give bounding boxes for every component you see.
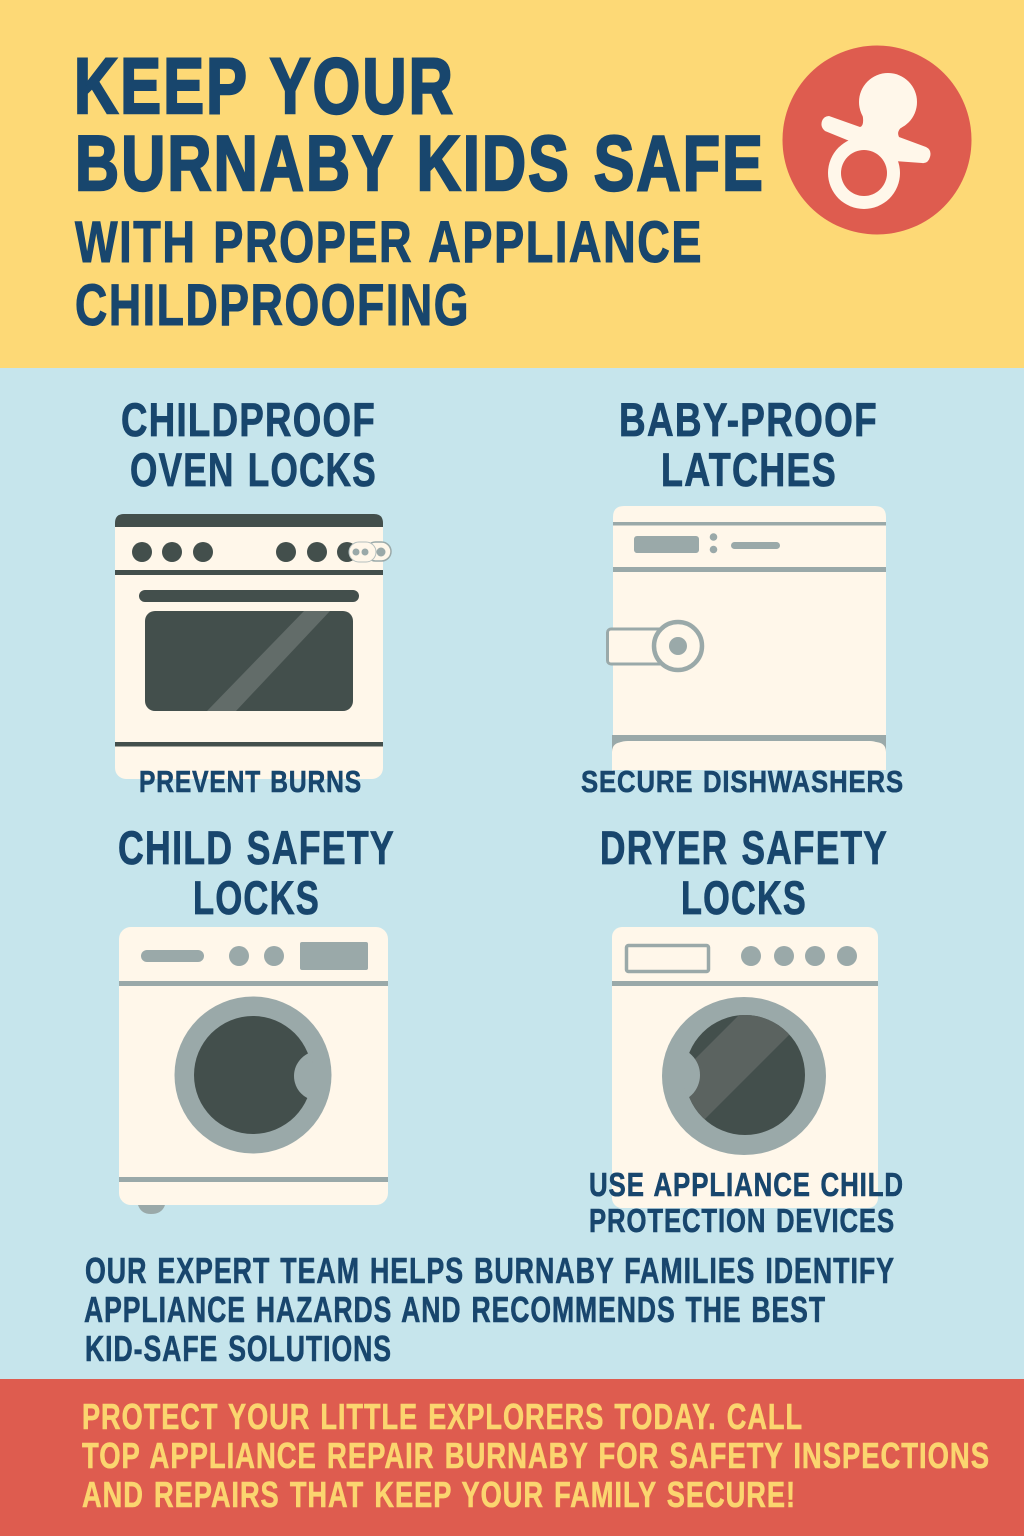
title (74, 41, 765, 207)
heading: dryer safety locks: LOCKS (681, 871, 807, 924)
call to action: PROTECT YOUR LITTLE EXPLORERS TODAY. CALL (82, 1396, 803, 1437)
call to action: AND REPAIRS THAT KEEP YOUR FAMILY SECURE! (82, 1474, 796, 1515)
subtitle: CHILDPROOFING (75, 273, 470, 338)
icon: pacifier badge (782, 46, 972, 234)
heading: childproof oven locks (121, 393, 377, 496)
text block: expert team (84, 1250, 895, 1369)
icon: dishwasher latch (608, 622, 702, 670)
title: KEEP YOUR (74, 41, 455, 130)
call to action (82, 1396, 990, 1515)
caption: secure dishwashers: SECURE DISHWASHERS (581, 764, 904, 799)
heading: childproof oven locks: OVEN LOCKS (130, 443, 377, 496)
panel: child safety locks (118, 821, 395, 1214)
caption: use appliance child protection devices (589, 1166, 904, 1239)
caption: use appliance child protection devices: USE APPLIANCE CHILD (589, 1166, 904, 1203)
caption: prevent burns: PREVENT BURNS (139, 764, 362, 799)
heading: dryer safety locks: DRYER SAFETY (600, 821, 888, 874)
subtitle: WITH PROPER APPLIANCE (75, 210, 703, 275)
icon: dishwasher (608, 506, 886, 778)
heading: childproof oven locks: CHILDPROOF (121, 393, 376, 446)
icon: oven knob lock (349, 542, 391, 562)
heading: dryer safety locks (600, 821, 888, 924)
heading: baby-proof latches (619, 393, 878, 496)
heading: baby-proof latches: BABY-PROOF (619, 393, 878, 446)
title: BURNABY KIDS SAFE (75, 119, 765, 207)
footer band (0, 1379, 1024, 1536)
panel: oven locks (115, 393, 391, 799)
icon: oven (115, 514, 391, 779)
heading: child safety locks (118, 821, 395, 924)
heading: baby-proof latches: LATCHES (661, 443, 837, 496)
subtitle (75, 210, 703, 338)
text block: expert team: KID-SAFE SOLUTIONS (85, 1328, 392, 1369)
icon: dryer (612, 927, 878, 1208)
heading: child safety locks: LOCKS (193, 871, 320, 924)
panel: latches (581, 393, 904, 799)
heading: child safety locks: CHILD SAFETY (118, 821, 395, 874)
header band (0, 0, 1024, 368)
panel: dryer safety locks (589, 821, 904, 1239)
icon: washing machine (119, 927, 388, 1214)
caption: use appliance child protection devices: PROTECTION DEVICES (589, 1202, 895, 1239)
